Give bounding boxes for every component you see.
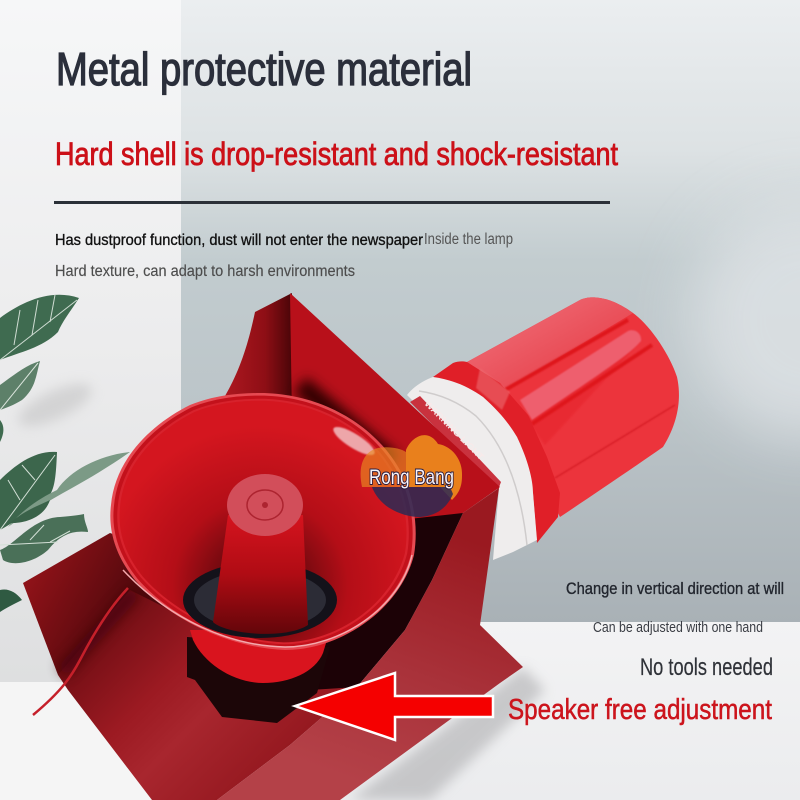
horn inner cone — [119, 401, 407, 642]
bracket side face — [217, 488, 523, 800]
horn back cone — [190, 630, 330, 683]
bracket inner shadow — [310, 513, 463, 690]
feature line one: Has dustproof function, dust will not enter the newspaper — [55, 232, 424, 249]
central driver cup — [213, 515, 308, 634]
lamp dome — [467, 297, 679, 517]
warning light label — [410, 396, 501, 490]
warning light label: WARNING LIGHT — [423, 398, 487, 463]
feature line two: Hard texture, can adapt to harsh environments — [55, 263, 355, 280]
feature line one: Inside the lamp — [424, 231, 513, 248]
bracket left wing — [225, 293, 292, 420]
speaker horn — [110, 393, 416, 723]
power cable — [33, 588, 128, 715]
black swivel base — [187, 637, 330, 723]
warning lamp — [407, 297, 679, 560]
watermark logo: Rong Bang — [369, 466, 454, 489]
red arrow pointing to swivel — [295, 673, 493, 740]
speaker driver ring — [183, 562, 337, 638]
lamp red shoulder — [433, 361, 560, 543]
bracket right face — [290, 293, 500, 545]
rim glare — [330, 422, 378, 460]
horn rim — [110, 393, 416, 650]
bracket floor — [58, 590, 360, 800]
watermark logo — [361, 435, 462, 517]
bracket rear wall — [23, 533, 190, 675]
red mounting bracket — [23, 293, 523, 800]
divider line — [54, 201, 610, 204]
title: Metal protective material — [56, 43, 472, 95]
right caption: one hand: Can be adjusted with one hand — [593, 619, 763, 636]
subtitle: Hard shell is drop-resistant and shock-resistant — [55, 136, 618, 172]
plant leaves — [0, 295, 130, 612]
white lamp collar — [407, 377, 537, 560]
